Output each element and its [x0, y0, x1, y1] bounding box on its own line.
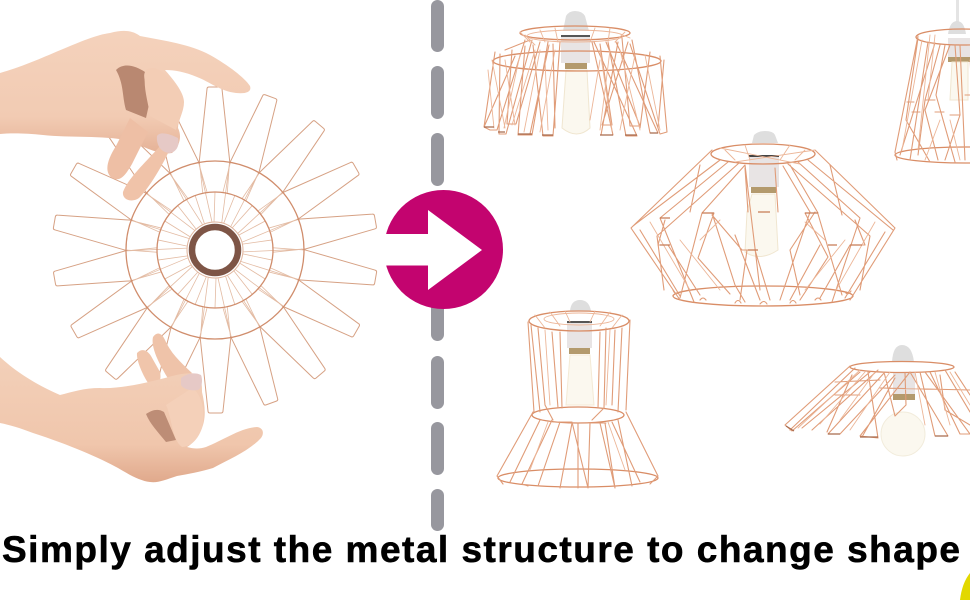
- lamp: diamond shape, centre: [631, 131, 895, 306]
- lamp: hourglass, bottom left: [497, 300, 658, 488]
- bottom hand: [0, 333, 263, 482]
- yellow corner shape: [960, 573, 970, 600]
- lamp: flattened umbrella, bottom right: [785, 345, 970, 456]
- divider dashes: [431, 0, 444, 531]
- lamp: tall shade, top right: [895, 0, 970, 163]
- lamp: wide shade, top left: [484, 11, 667, 136]
- caption: Simply adjust the metal structure to change shape: [2, 529, 960, 570]
- folded flat wire frame: [52, 87, 378, 413]
- top hand: [0, 31, 250, 200]
- arrow badge: [380, 190, 503, 309]
